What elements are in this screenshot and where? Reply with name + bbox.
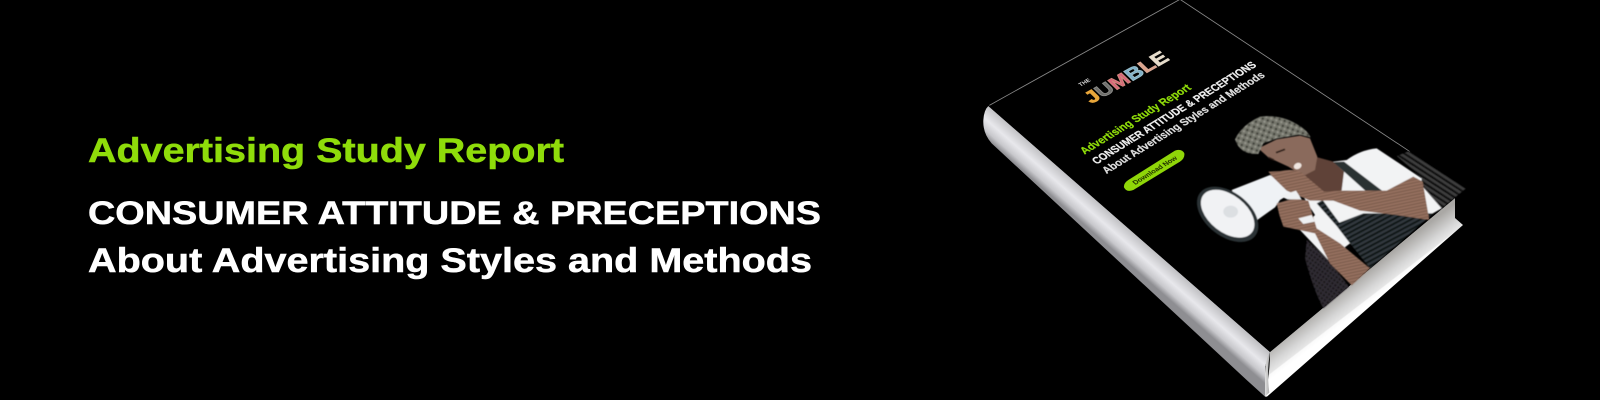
cover subtitle line 2: About Advertising Styles and Methods [1100,70,1268,176]
apron strap [1333,162,1383,193]
download now button: Download Now [1131,155,1180,186]
logo small word: THE [1077,78,1092,88]
book cover [988,0,1466,352]
raised arm [1268,170,1429,220]
book spine [983,106,1270,397]
download now button [1124,150,1184,191]
megaphone bell [1187,175,1269,253]
hair [1235,116,1311,154]
lower apron [1305,240,1349,308]
megaphone handle [1280,191,1315,224]
face [1258,136,1317,176]
logo wordmark: JUMBLE [1079,48,1174,107]
person with megaphone [1187,116,1466,308]
book bottom page edge [1265,198,1463,397]
cover logo [1077,48,1174,107]
cover title [1077,60,1268,176]
apron [1317,200,1433,268]
eyes [1268,149,1285,160]
subheading: about advertising styles and methods: About Advertising Styles and Methods [88,242,812,280]
neck [1303,150,1344,195]
t-shirt [1300,148,1442,260]
striped backdrop [1397,151,1466,208]
megaphone horn [1232,175,1297,224]
subheading: consumer attitude and preceptions: CONSUMER ATTITUDE & PRECEPTIONS [88,195,821,231]
cover heading: Advertising Study Report [1077,82,1194,157]
lower arm and hand [1277,198,1370,285]
report book mockup [983,0,1466,397]
cover subtitle line 1: CONSUMER ATTITUDE & PRECEPTIONS [1090,60,1260,167]
mouth [1293,162,1303,170]
book corner fold [1265,352,1270,397]
heading: advertising study report: Advertising Study Report [88,132,564,170]
